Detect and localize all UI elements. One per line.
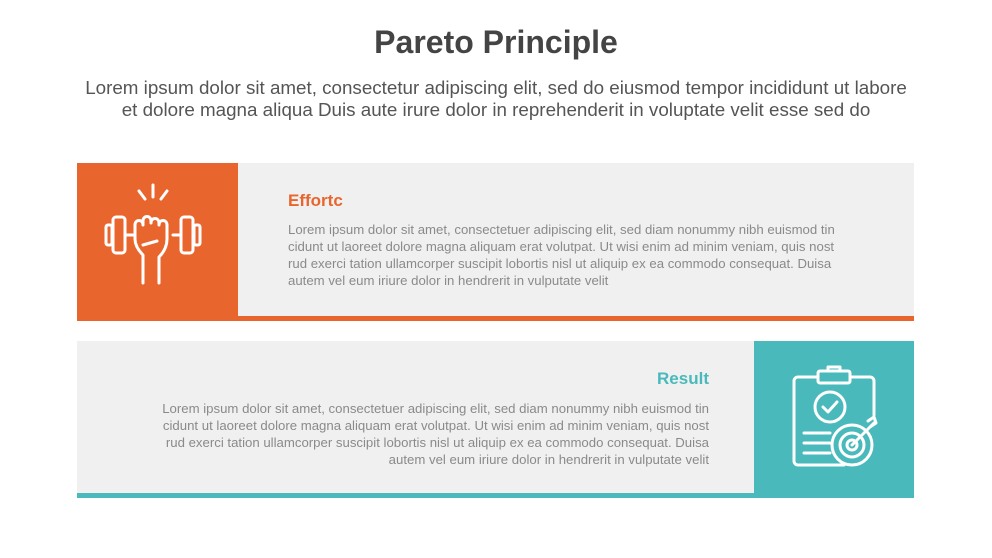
text: effort body: cidunt ut laoreet dolore magna aliquam erat volutpat. Ut wisi enim ad minim veniam, quis nost bbox=[288, 239, 834, 254]
panel: result bbox=[77, 341, 914, 498]
bottom bar: teal bbox=[77, 493, 754, 498]
text: result body bbox=[162, 401, 709, 467]
icon: dumbbell fist bbox=[77, 163, 238, 321]
text: result body: cidunt ut laoreet dolore magna aliquam erat volutpat. Ut wisi enim ad minim veniam, quis nost bbox=[163, 418, 709, 433]
subtitle: et dolore magna aliqua Duis aute irure dolor in reprehenderit in voluptate velit esse sed do bbox=[122, 99, 870, 120]
text: effort body: autem vel eum iriure dolor in hendrerit in vulputate velit bbox=[288, 273, 608, 288]
text: effort body: rud exerci tation ullamcorper suscipit lobortis nisl ut aliquip ex ea commodo consequat. Duisa bbox=[288, 256, 831, 271]
heading: Result: Result bbox=[657, 369, 709, 388]
text: result body: rud exerci tation ullamcorper suscipit lobortis nisl ut aliquip ex ea commodo consequat. Duisa bbox=[166, 435, 709, 450]
heading: Effortc: Effortc bbox=[288, 191, 343, 210]
text: effort body: Lorem ipsum dolor sit amet, consectetuer adipiscing elit, sed diam nonummy nibh euismod tin bbox=[288, 222, 835, 237]
text: result body: autem vel eum iriure dolor in hendrerit in vulputate velit bbox=[389, 452, 709, 467]
subtitle: Lorem ipsum dolor sit amet, consectetur adipiscing elit, sed do eiusmod tempor incididunt ut labore bbox=[85, 77, 907, 98]
text: effort body bbox=[288, 222, 835, 288]
panel: effort bbox=[77, 163, 914, 321]
subtitle bbox=[85, 77, 907, 120]
icon: clipboard target bbox=[754, 341, 914, 498]
bottom bar: orange bbox=[77, 316, 914, 321]
text: result body: Lorem ipsum dolor sit amet, consectetuer adipiscing elit, sed diam nonummy nibh euismod tin bbox=[162, 401, 709, 416]
title: Pareto Principle bbox=[374, 24, 618, 60]
